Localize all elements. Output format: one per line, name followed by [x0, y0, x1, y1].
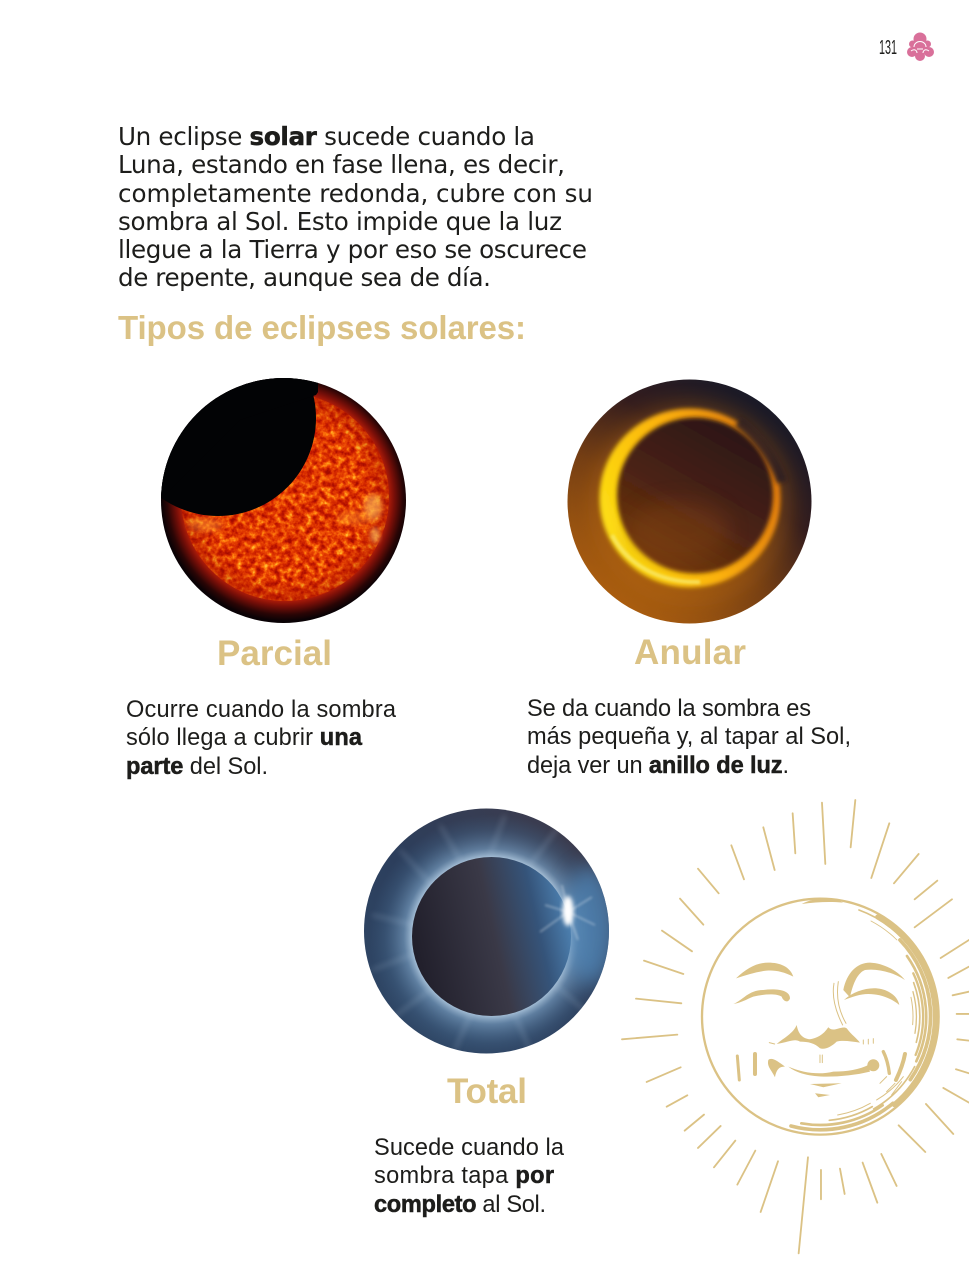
text: anular description: Se da cuando la sombra es	[527, 696, 811, 722]
intro text block: llegue a la Tierra y por eso se oscurece	[118, 235, 587, 264]
text: total description: sombra tapa por	[374, 1163, 554, 1189]
intro text block	[118, 122, 593, 292]
illustration: smiling sun	[622, 800, 969, 1253]
text: parcial description: parte del Sol.	[126, 754, 268, 780]
intro text block: sombra al Sol. Esto impide que la luz	[118, 207, 562, 236]
intro text block: Luna, estando en fase llena, es decir,	[118, 150, 565, 179]
label: total: Total	[447, 1072, 527, 1111]
text: parcial description	[126, 697, 397, 780]
text: anular description: más pequeña y, al tapar al Sol,	[527, 724, 851, 750]
text: total description	[374, 1135, 565, 1218]
label: parcial: Parcial	[217, 634, 332, 673]
photo: total eclipse	[362, 806, 618, 1058]
heading: tipos de eclipses solares: Tipos de eclipses solares:	[118, 309, 526, 346]
text: parcial description: sólo llega a cubrir una	[126, 725, 363, 751]
text: parcial description: Ocurre cuando la sombra	[126, 697, 397, 723]
sun face outline	[702, 899, 939, 1135]
intro text block: de repente, aunque sea de día.	[118, 263, 491, 292]
text: total description: completo al Sol.	[374, 1192, 546, 1218]
page number: 131	[879, 37, 897, 59]
text: anular description: deja ver un anillo de luz.	[527, 753, 789, 779]
hatched crescent shading	[791, 910, 935, 1130]
text: anular description	[527, 696, 851, 779]
top thick edge	[802, 898, 843, 904]
face features	[733, 963, 905, 1097]
sun rays	[622, 800, 969, 1253]
photo: partial eclipse	[161, 378, 406, 623]
label: anular: Anular	[634, 633, 746, 672]
photo: annular eclipse	[566, 378, 814, 626]
intro text block: Un eclipse solar sucede cuando la	[118, 122, 535, 151]
intro text block: completamente redonda, cubre con su	[118, 179, 593, 208]
icon: pink flower ornament	[907, 32, 934, 61]
text: total description: Sucede cuando la	[374, 1135, 565, 1161]
cheek and nose lines	[737, 982, 905, 1095]
